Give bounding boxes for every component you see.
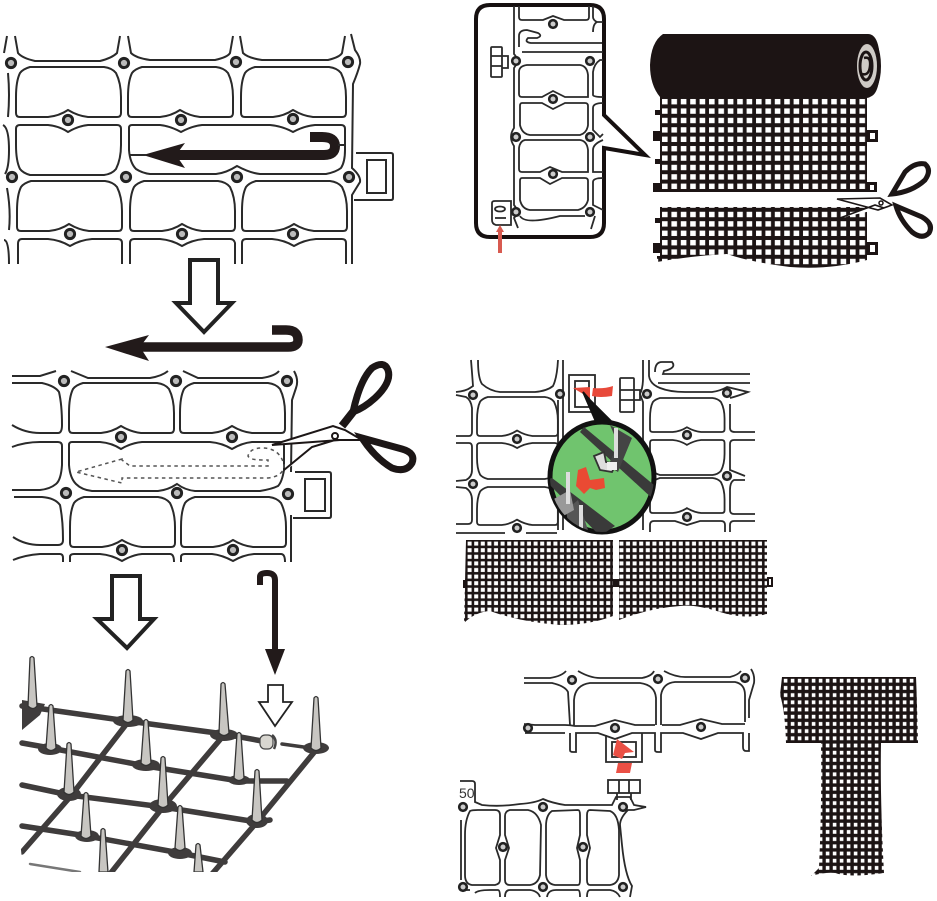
connector cap bbox=[620, 378, 640, 412]
mesh sheet upper bbox=[660, 97, 867, 192]
net joints bbox=[22, 700, 329, 859]
net pegs, top panel bbox=[6, 57, 354, 239]
right net linework bbox=[640, 360, 755, 532]
right net pegs bbox=[643, 389, 731, 521]
mesh vertical stem bbox=[811, 743, 884, 876]
red dashed arrow bbox=[573, 386, 613, 398]
mesh horizontal bar bbox=[780, 677, 918, 743]
mesh sheet lower bbox=[657, 207, 867, 268]
mesh side tabs bbox=[653, 110, 878, 255]
enlarged net pegs bbox=[512, 20, 594, 216]
upper net pegs bbox=[524, 674, 749, 732]
connector cap bbox=[608, 780, 640, 800]
connection tab bbox=[569, 375, 595, 412]
scissors, large bbox=[272, 364, 413, 470]
panel: mesh roll cut with scissors bbox=[650, 34, 930, 268]
arrow: black hook pin left bbox=[105, 330, 298, 361]
panel: T-shaped mesh join bbox=[780, 677, 918, 876]
lower net section bbox=[460, 781, 646, 897]
mesh roll body bbox=[650, 34, 880, 97]
attachment tab, top panel bbox=[354, 153, 393, 200]
arrow: small outline down bbox=[259, 685, 292, 726]
net cells, top panel bbox=[16, 67, 347, 264]
net pegs, cut panel bbox=[59, 376, 293, 555]
net cells, cut panel bbox=[12, 371, 297, 562]
clip ring on net bbox=[260, 735, 276, 749]
net bars bbox=[22, 706, 318, 874]
enlarged net linework bbox=[491, 6, 603, 229]
joined mesh sections bbox=[463, 540, 773, 625]
panel: net with hook pin inserted bbox=[3, 34, 393, 264]
red arrow bbox=[613, 739, 634, 773]
left net linework bbox=[456, 360, 563, 533]
panel: 3D perspective net with spikes bbox=[22, 656, 329, 874]
lower net pegs bbox=[459, 803, 627, 891]
attachment tab, cut panel bbox=[293, 472, 331, 518]
spikes bbox=[28, 656, 321, 872]
arrow: black hook pin down bbox=[260, 573, 285, 675]
arrow: large outline down 2 bbox=[97, 576, 154, 648]
callout: enlarged net edge bbox=[476, 5, 645, 253]
dashed outline of removed hook bbox=[76, 448, 284, 483]
net outer edges, top panel bbox=[3, 34, 360, 264]
panel: two mesh sections joined, with detail bbox=[456, 360, 773, 625]
scissors, small bbox=[837, 164, 930, 236]
upper net section bbox=[524, 669, 754, 752]
green detail circle bbox=[545, 392, 660, 536]
red arrow to tag bbox=[496, 225, 504, 253]
connection tab bbox=[606, 733, 642, 762]
size label: 50 bbox=[459, 785, 475, 801]
callout frame with pointer bbox=[476, 5, 645, 237]
panel: net cut with scissors bbox=[12, 364, 413, 562]
panel: joining mesh at right angle bbox=[459, 669, 754, 897]
arrow: large outline down 1 bbox=[176, 260, 232, 332]
arrow: hook pin moving left bbox=[130, 137, 344, 168]
left net pegs bbox=[469, 390, 564, 532]
